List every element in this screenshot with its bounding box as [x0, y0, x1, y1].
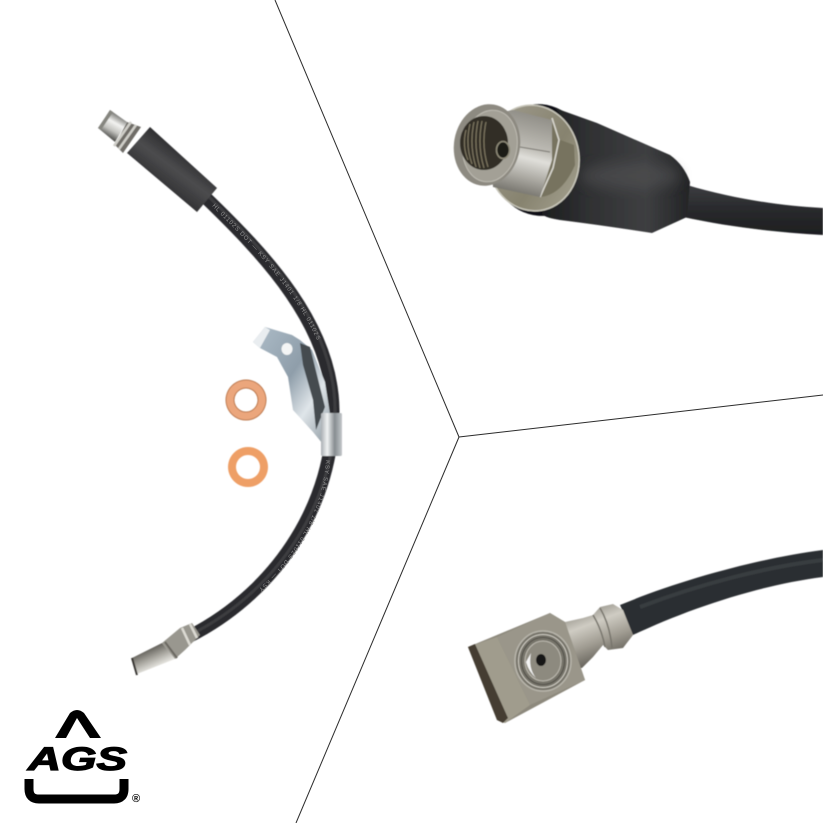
concentric ring seal	[515, 631, 571, 691]
hose highlight	[192, 195, 335, 634]
panel: close-up of banjo end	[468, 550, 823, 723]
black band behind flange	[483, 98, 597, 222]
hose printed marking lower: KSY SAE J1401 1/8 HL 01102S DOT — KSY	[260, 460, 330, 592]
crimped ferrule	[565, 604, 633, 668]
logo top chevron	[55, 710, 101, 738]
copper washer bottom	[228, 447, 268, 487]
panel: close-up of threaded end with sleeve	[447, 98, 823, 235]
fluid hole	[536, 654, 546, 666]
panel: full brake hose assembly	[98, 110, 342, 675]
banjo block	[468, 613, 585, 723]
rubber sleeve close-up	[542, 108, 690, 233]
cylinder body	[487, 110, 552, 197]
hose close-up bottom	[620, 550, 823, 635]
panel dividers	[275, 0, 823, 823]
logo: AGS	[27, 710, 140, 805]
mounting bracket	[253, 327, 331, 443]
hose body	[190, 197, 333, 636]
registered mark: ®	[132, 793, 140, 805]
copper washer top	[226, 380, 266, 420]
hose clip	[321, 413, 342, 456]
top crimp fitting	[98, 110, 141, 153]
logo bottom bracket	[29, 779, 124, 799]
hose close-up top	[683, 185, 823, 235]
bottom metal fitting	[132, 623, 200, 675]
top rubber sleeve	[127, 127, 217, 212]
internal thread	[464, 121, 488, 168]
hex flange	[480, 99, 586, 217]
logo wordmark: AGS	[27, 741, 128, 777]
banjo end face	[468, 637, 530, 723]
hose printed marking upper: HL 01102S DOT — KSY SAE J1401 1/8 HL 01102S	[212, 204, 320, 340]
threaded opening head	[447, 99, 527, 191]
